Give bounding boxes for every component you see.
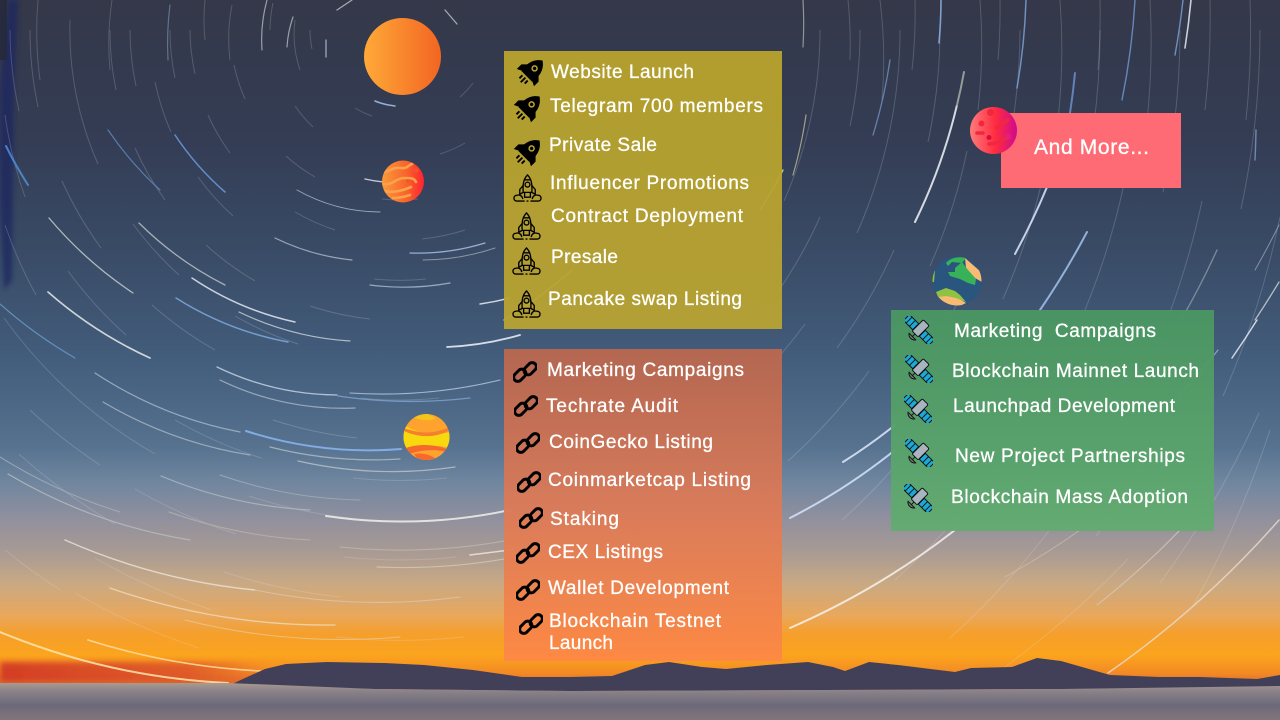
item: Wallet Development: Wallet Development xyxy=(548,578,730,599)
icon: chain link xyxy=(513,393,539,419)
item: Pancake swap Listing: Pancake swap Listing xyxy=(548,289,742,310)
icon: outline rocket xyxy=(514,175,541,201)
icon: yellow banded planet xyxy=(403,414,450,462)
item: CEX Listings: CEX Listings xyxy=(548,542,663,563)
item: Private Sale: Private Sale xyxy=(549,135,657,156)
bright star trails: right sky xyxy=(790,0,1279,673)
item: Blockchain Mass Adoption: Blockchain Mass Adoption xyxy=(951,487,1188,508)
panel: third roadmap phase (green) xyxy=(891,310,1214,531)
callout text: And More... xyxy=(1034,136,1149,159)
item: CoinGecko Listing: CoinGecko Listing xyxy=(549,432,713,453)
icon: chain link xyxy=(515,430,541,456)
icon: outline rocket xyxy=(513,213,540,239)
icon: chain link xyxy=(518,505,544,531)
item: Telegram 700 members: Telegram 700 members xyxy=(550,96,763,117)
item: Staking: Staking xyxy=(550,509,619,530)
icon: satellite xyxy=(897,478,938,519)
bright star trails: left sky xyxy=(0,0,520,683)
icon: satellite xyxy=(898,349,939,390)
item: New Project Partnerships: New Project Partnerships xyxy=(955,446,1185,467)
water xyxy=(0,683,1280,720)
icon: outline rocket xyxy=(513,291,540,317)
item: Contract Deployment: Contract Deployment xyxy=(551,206,744,227)
icon: chain link xyxy=(516,469,542,495)
icon: earth xyxy=(932,256,982,306)
item: Marketing Campaigns: Marketing Campaigns xyxy=(954,321,1156,342)
item: Website Launch: Website Launch xyxy=(551,62,694,83)
icon: satellite xyxy=(897,389,938,430)
icon: filled rocket xyxy=(512,52,551,91)
icon: chain link xyxy=(515,577,541,603)
panel: first roadmap phase (yellow) xyxy=(504,51,782,329)
icon: filled rocket xyxy=(509,132,548,171)
icon: outline rocket xyxy=(513,248,540,274)
panel: second roadmap phase (orange) xyxy=(504,349,782,661)
distant island silhouette xyxy=(228,658,1280,691)
icon: filled rocket xyxy=(509,88,548,127)
icon: pink planet xyxy=(970,107,1017,154)
item: Influencer Promotions: Influencer Promotions xyxy=(550,173,749,194)
item: Launchpad Development: Launchpad Development xyxy=(953,396,1176,417)
icon: chain link xyxy=(518,611,544,637)
icon: red-orange planet xyxy=(382,160,424,202)
icon: satellite xyxy=(898,433,939,474)
item: Presale: Presale xyxy=(551,247,618,268)
item: Marketing Campaigns: Marketing Campaigns xyxy=(547,360,744,381)
icon: satellite xyxy=(898,310,939,351)
icon: orange sun xyxy=(364,18,441,95)
panel: And More callout xyxy=(1001,113,1181,188)
item: Blockchain Testnet Launch: Blockchain Testnet xyxy=(549,611,722,632)
icon: chain link xyxy=(515,540,541,566)
item: Techrate Audit: Techrate Audit xyxy=(546,396,679,417)
item: Coinmarketcap Listing: Coinmarketcap Listing xyxy=(548,470,751,491)
trails through the yellow panel area xyxy=(504,170,783,320)
icon: chain link xyxy=(512,359,538,385)
panel: second roadmap phase (orange): Launch xyxy=(549,633,613,654)
item: Blockchain Mainnet Launch: Blockchain Mainnet Launch xyxy=(952,361,1199,382)
